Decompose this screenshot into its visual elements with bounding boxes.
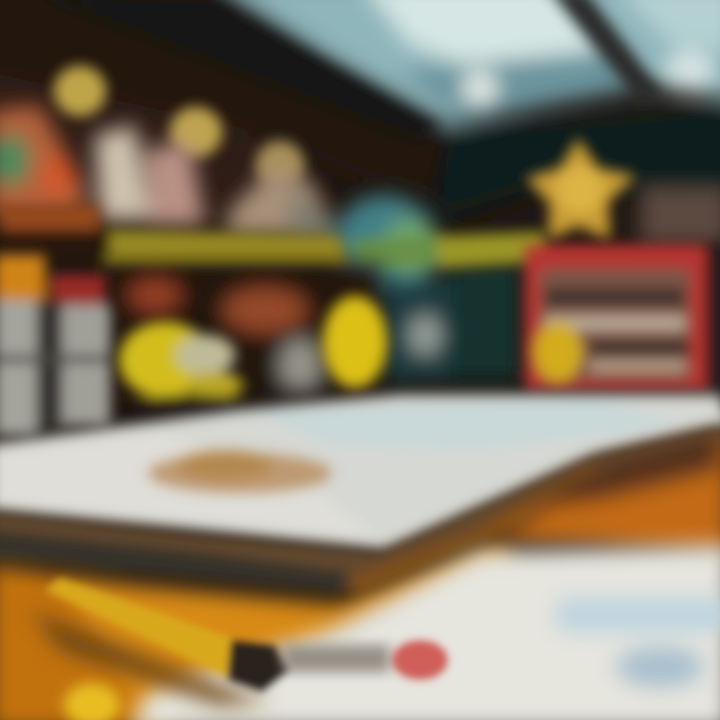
left side books [0,255,110,435]
ceiling and window [0,0,720,230]
book edge [0,425,720,595]
orange desk lower [0,545,520,720]
yellow shelf band [0,205,545,268]
pencil ferrule [228,640,290,692]
lower shelf dark area [100,265,380,395]
pencil shaft [280,645,390,672]
red shelf unit [525,245,720,395]
yellow toys [119,296,387,415]
lower white paper [130,545,720,720]
shelf toys [0,105,345,240]
pencil [30,578,448,705]
dark wall right [640,185,720,245]
globe [333,195,520,380]
faded writing on lower paper [555,598,720,687]
pencil shadow [30,610,270,705]
yellow blob lower left [64,683,120,720]
pencil body [45,578,238,678]
orange desk right [490,435,720,560]
star [526,138,636,240]
roof beams [40,0,665,140]
hanging lights [54,66,304,189]
pencil eraser [392,640,448,680]
cookie on paper [148,450,332,493]
white paper on table [0,395,720,550]
